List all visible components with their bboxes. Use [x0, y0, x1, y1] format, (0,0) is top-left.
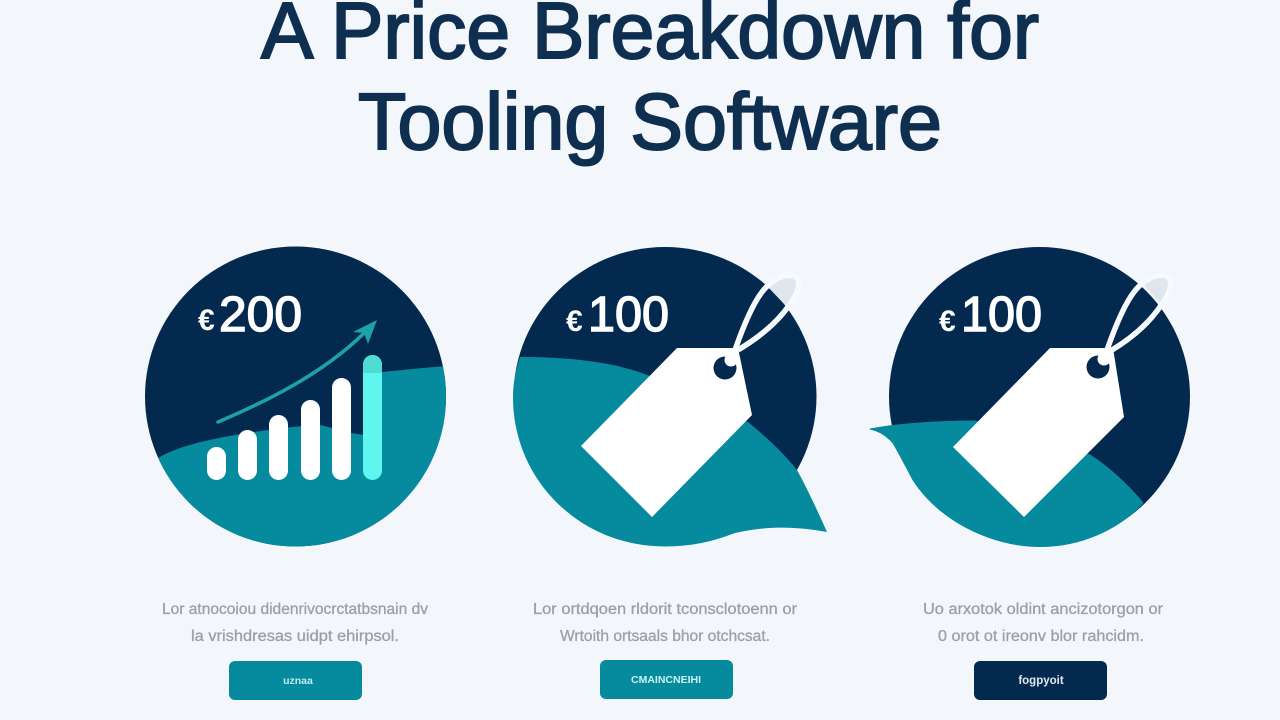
price label: €	[566, 305, 583, 338]
circle with wave	[870, 247, 1190, 546]
price label: €	[198, 304, 215, 337]
panel: third price	[870, 247, 1190, 546]
text block: second description	[533, 601, 797, 645]
bar chart	[207, 355, 382, 480]
text block: first description	[162, 601, 428, 645]
button: third: fogpyoit	[1018, 675, 1064, 687]
text block: third description	[923, 601, 1163, 645]
text block: first description: la vrishdresas uidpt ehirpsol.	[191, 628, 399, 645]
text block: first description: Lor atnocoiou didenrivocrctatbsnain dv	[162, 601, 428, 618]
text block: third description: Uo arxotok oldint ancizotorgon or	[923, 601, 1163, 618]
speech-bubble circle	[513, 247, 827, 546]
text block: second description: Lor ortdqoen rldorit tconsclotoenn or	[533, 601, 797, 618]
text block: second description: Wrtoith ortsaals bhor otchcsat.	[560, 628, 770, 645]
panel: second price	[513, 247, 827, 546]
price value: 100	[961, 288, 1042, 342]
panel: first price	[140, 240, 450, 550]
text block: third description: 0 orot ot ireonv blor rahcidm.	[938, 628, 1144, 645]
button: third	[974, 661, 1107, 700]
circle chart background	[140, 240, 450, 550]
button: first	[229, 661, 362, 700]
title: Tooling Software	[358, 77, 942, 166]
icon: price tag	[953, 275, 1173, 517]
button: first: uznaa	[283, 675, 313, 687]
price value: 100	[588, 288, 669, 342]
price value: 200	[219, 288, 302, 342]
price label: €	[939, 305, 956, 338]
button: second: CMAINCNEIHI	[631, 674, 701, 686]
title	[261, 0, 1039, 166]
button: second	[600, 660, 733, 699]
growth arrow	[218, 320, 377, 422]
icon: price tag	[581, 275, 799, 517]
